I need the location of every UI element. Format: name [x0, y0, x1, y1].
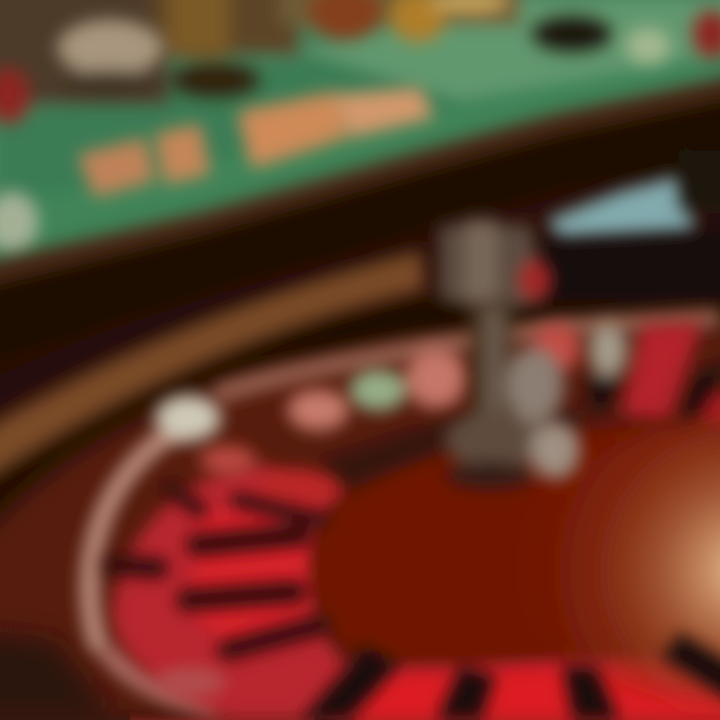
- wheel outer bowl: [0, 320, 720, 720]
- bottom edge underlay: [0, 680, 720, 720]
- number ring: pale outer track: [90, 318, 720, 708]
- betting layout: orange number strip: [78, 88, 434, 197]
- dark pocket dividers: left side: [112, 488, 320, 650]
- inner frets band: [320, 410, 580, 490]
- dark table edge band: [0, 72, 720, 372]
- dark pocket dividers: bottom: [300, 632, 720, 720]
- pale blue background glimpse: [548, 176, 695, 238]
- pale pocket highlight: lower left: [154, 668, 226, 696]
- light glow on the cone: [510, 420, 720, 700]
- number ring: red pockets: [112, 465, 720, 720]
- dark bottom left corner: [0, 630, 115, 720]
- number ring: saturated red inner pockets: [190, 510, 310, 650]
- dark strip behind wheel: [540, 228, 720, 300]
- number ring: upper pockets: [156, 322, 720, 503]
- table objects: chips and items along the top edge: [0, 0, 720, 252]
- panel: green betting table: [0, 0, 720, 275]
- wooden wheel rim: [0, 240, 720, 540]
- wheel turret: central spindle: [440, 220, 579, 489]
- number ring: bright red bottom pockets: [330, 664, 720, 720]
- wheel centre cone: [313, 424, 720, 665]
